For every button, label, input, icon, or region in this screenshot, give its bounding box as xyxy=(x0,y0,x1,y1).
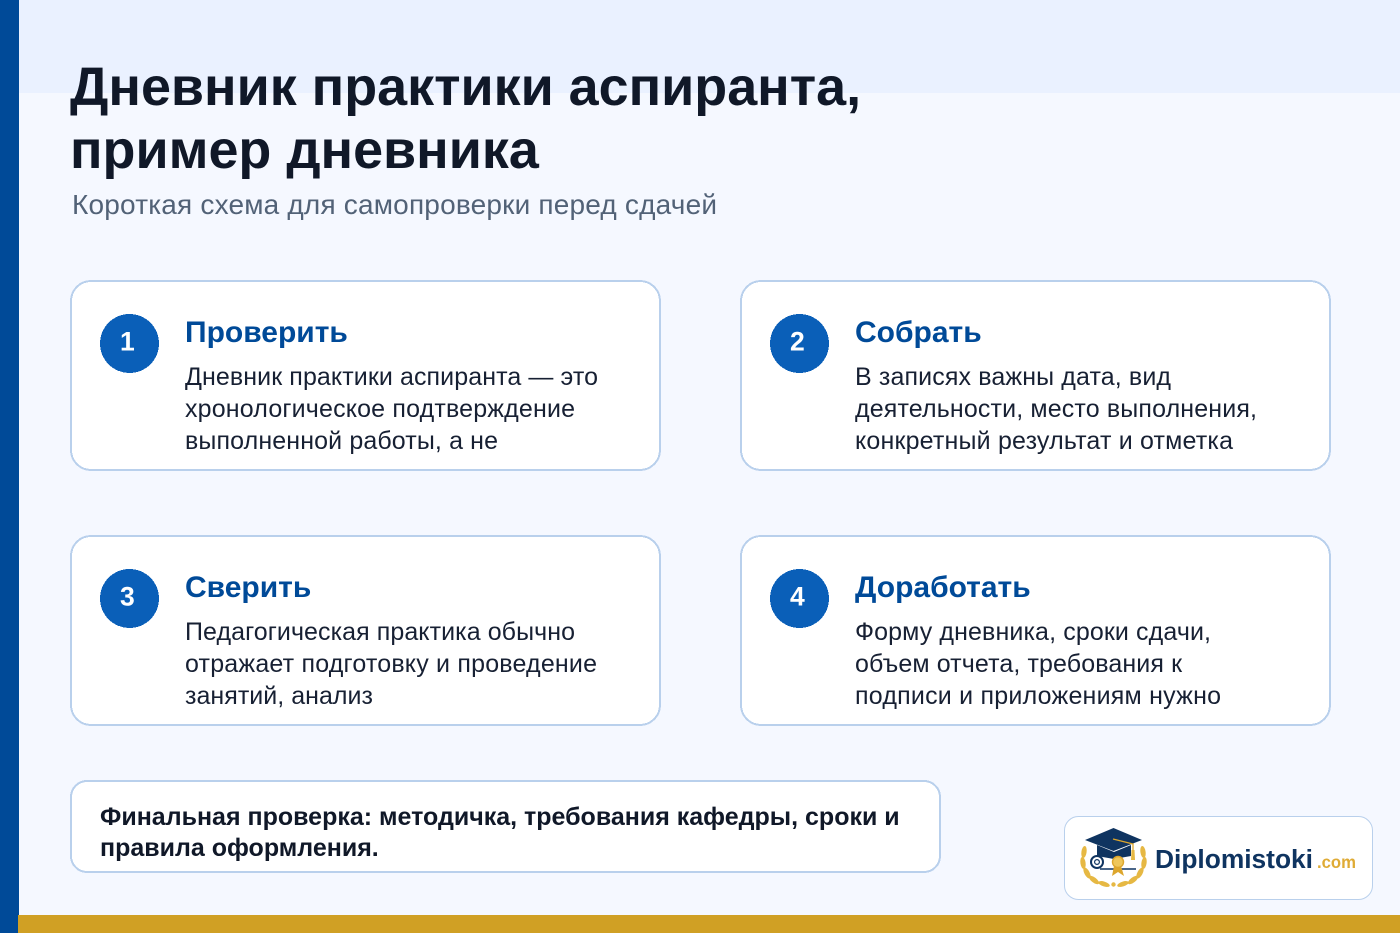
text: step 3 xyxy=(185,618,597,710)
number badge 3 xyxy=(100,569,159,628)
text: step 2: деятельности, место выполнения, xyxy=(855,395,1257,423)
callout: final check xyxy=(71,781,940,872)
text: step 3: Педагогическая практика обычно xyxy=(185,618,575,646)
panel: step 3 xyxy=(71,536,660,725)
panel: step 2 xyxy=(741,281,1330,470)
title xyxy=(70,57,861,180)
text: step 4: подписи и приложениям нужно xyxy=(855,682,1221,710)
logo wordmark: Diplomistoki xyxy=(1155,846,1313,874)
subtitle: Короткая схема для самопроверки перед сдачей xyxy=(72,189,717,220)
number badge 1: 1 xyxy=(120,326,135,356)
text: step 4: Форму дневника, сроки сдачи, xyxy=(855,618,1211,646)
icon: graduation cap with laurel xyxy=(1080,828,1147,888)
logo wordmark: .com xyxy=(1317,852,1356,872)
header band xyxy=(18,0,1400,93)
number badge 4: 4 xyxy=(790,582,805,612)
left accent bar xyxy=(0,0,19,933)
text: step 3: занятий, анализ xyxy=(185,682,373,710)
heading: Доработать: Доработать xyxy=(855,571,1031,604)
panel: step 4 xyxy=(741,536,1330,725)
title: пример дневника xyxy=(70,120,540,180)
number badge 4 xyxy=(770,569,829,628)
text: step 1: Дневник практики аспиранта — это xyxy=(185,363,598,391)
number badge 2: 2 xyxy=(790,326,805,356)
heading: Проверить: Проверить xyxy=(185,316,348,349)
number badge 3: 3 xyxy=(120,582,135,612)
text: step 4 xyxy=(855,618,1221,710)
text: step 3: отражает подготовку и проведение xyxy=(185,650,597,678)
panel: step 1 xyxy=(71,281,660,470)
callout text xyxy=(100,803,900,862)
text: step 2: В записях важны дата, вид xyxy=(855,363,1171,391)
text: step 4: объем отчета, требования к xyxy=(855,650,1183,678)
bottom accent bar xyxy=(18,915,1400,933)
number badge 2 xyxy=(770,314,829,373)
heading: Сверить: Сверить xyxy=(185,571,311,604)
title: Дневник практики аспиранта, xyxy=(70,57,861,117)
text: step 2 xyxy=(855,363,1257,455)
number badge 1 xyxy=(100,314,159,373)
logo card xyxy=(1064,816,1372,900)
text: step 1: хронологическое подтверждение xyxy=(185,395,575,423)
callout text: Финальная проверка: методичка, требования кафедры, сроки и xyxy=(100,803,900,831)
callout text: правила оформления. xyxy=(100,834,379,862)
text: step 1 xyxy=(185,363,598,455)
heading: Собрать: Собрать xyxy=(855,316,982,349)
text: step 1: выполненной работы, а не xyxy=(185,427,498,455)
text: step 2: конкретный результат и отметка xyxy=(855,427,1233,455)
